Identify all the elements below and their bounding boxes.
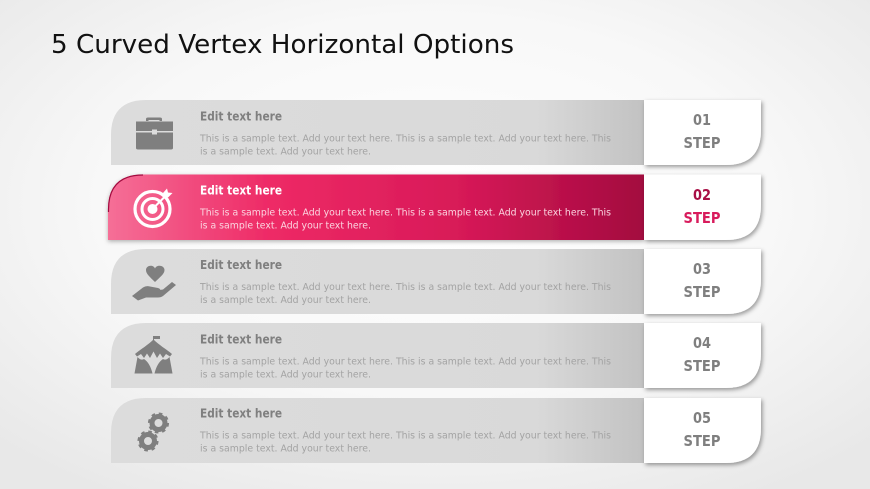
body text: This is a sample text. Add your text here. This is a sample text. Add your text here. This bbox=[199, 356, 611, 368]
icon: hand holding heart bbox=[132, 266, 176, 300]
step number: 02 bbox=[693, 186, 711, 204]
body text: This is a sample text. Add your text here. This is a sample text. Add your text here. This bbox=[199, 282, 611, 293]
step label: STEP bbox=[684, 283, 721, 301]
band bbox=[111, 249, 644, 314]
title: 5 Curved Vertex Horizontal Options bbox=[51, 30, 514, 60]
panel: step 01 bbox=[111, 100, 761, 165]
step label: STEP bbox=[684, 209, 721, 227]
panel: step 02 highlighted bbox=[108, 174, 761, 240]
step label: STEP bbox=[684, 357, 721, 375]
body text: is a sample text. Add your text here. bbox=[200, 146, 371, 158]
body text bbox=[199, 282, 611, 306]
band bbox=[111, 100, 644, 165]
curved edge accent bbox=[108, 175, 143, 212]
body text: is a sample text. Add your text here. bbox=[200, 370, 371, 380]
step number: 05 bbox=[693, 409, 711, 427]
body text: This is a sample text. Add your text here. This is a sample text. Add your text here. This bbox=[199, 430, 611, 442]
body text bbox=[199, 134, 611, 158]
step tab bbox=[644, 249, 761, 314]
step tab bbox=[644, 100, 761, 165]
band bbox=[111, 398, 644, 463]
step number: 04 bbox=[693, 334, 711, 352]
body text bbox=[199, 356, 611, 380]
body text: is a sample text. Add your text here. bbox=[200, 220, 371, 232]
icon: briefcase bbox=[136, 118, 173, 150]
step tab bbox=[644, 174, 761, 240]
step tab bbox=[644, 323, 761, 388]
heading: Edit text here bbox=[200, 258, 282, 272]
band bbox=[108, 174, 644, 240]
panel: step 04 bbox=[111, 323, 761, 388]
heading: Edit text here bbox=[200, 184, 282, 198]
body text: This is a sample text. Add your text here. This is a sample text. Add your text here. This bbox=[199, 208, 611, 218]
heading: Edit text here bbox=[200, 406, 282, 420]
body text: This is a sample text. Add your text here. This is a sample text. Add your text here. This bbox=[199, 134, 611, 144]
icon: target bbox=[135, 188, 172, 226]
panel: step 05 bbox=[111, 398, 761, 463]
icon: circus tent bbox=[134, 336, 172, 374]
heading: Edit text here bbox=[200, 332, 282, 346]
step number: 01 bbox=[693, 111, 711, 129]
step label: STEP bbox=[684, 432, 721, 450]
body text bbox=[199, 208, 611, 232]
step label: STEP bbox=[684, 134, 721, 152]
body text bbox=[199, 430, 611, 454]
step number: 03 bbox=[693, 260, 711, 278]
band bbox=[111, 323, 644, 388]
heading: Edit text here bbox=[200, 110, 282, 124]
panel: step 03 bbox=[111, 249, 761, 314]
icon: gears bbox=[139, 414, 168, 450]
step tab bbox=[644, 398, 761, 463]
body text: is a sample text. Add your text here. bbox=[200, 444, 371, 454]
body text: is a sample text. Add your text here. bbox=[200, 295, 371, 306]
